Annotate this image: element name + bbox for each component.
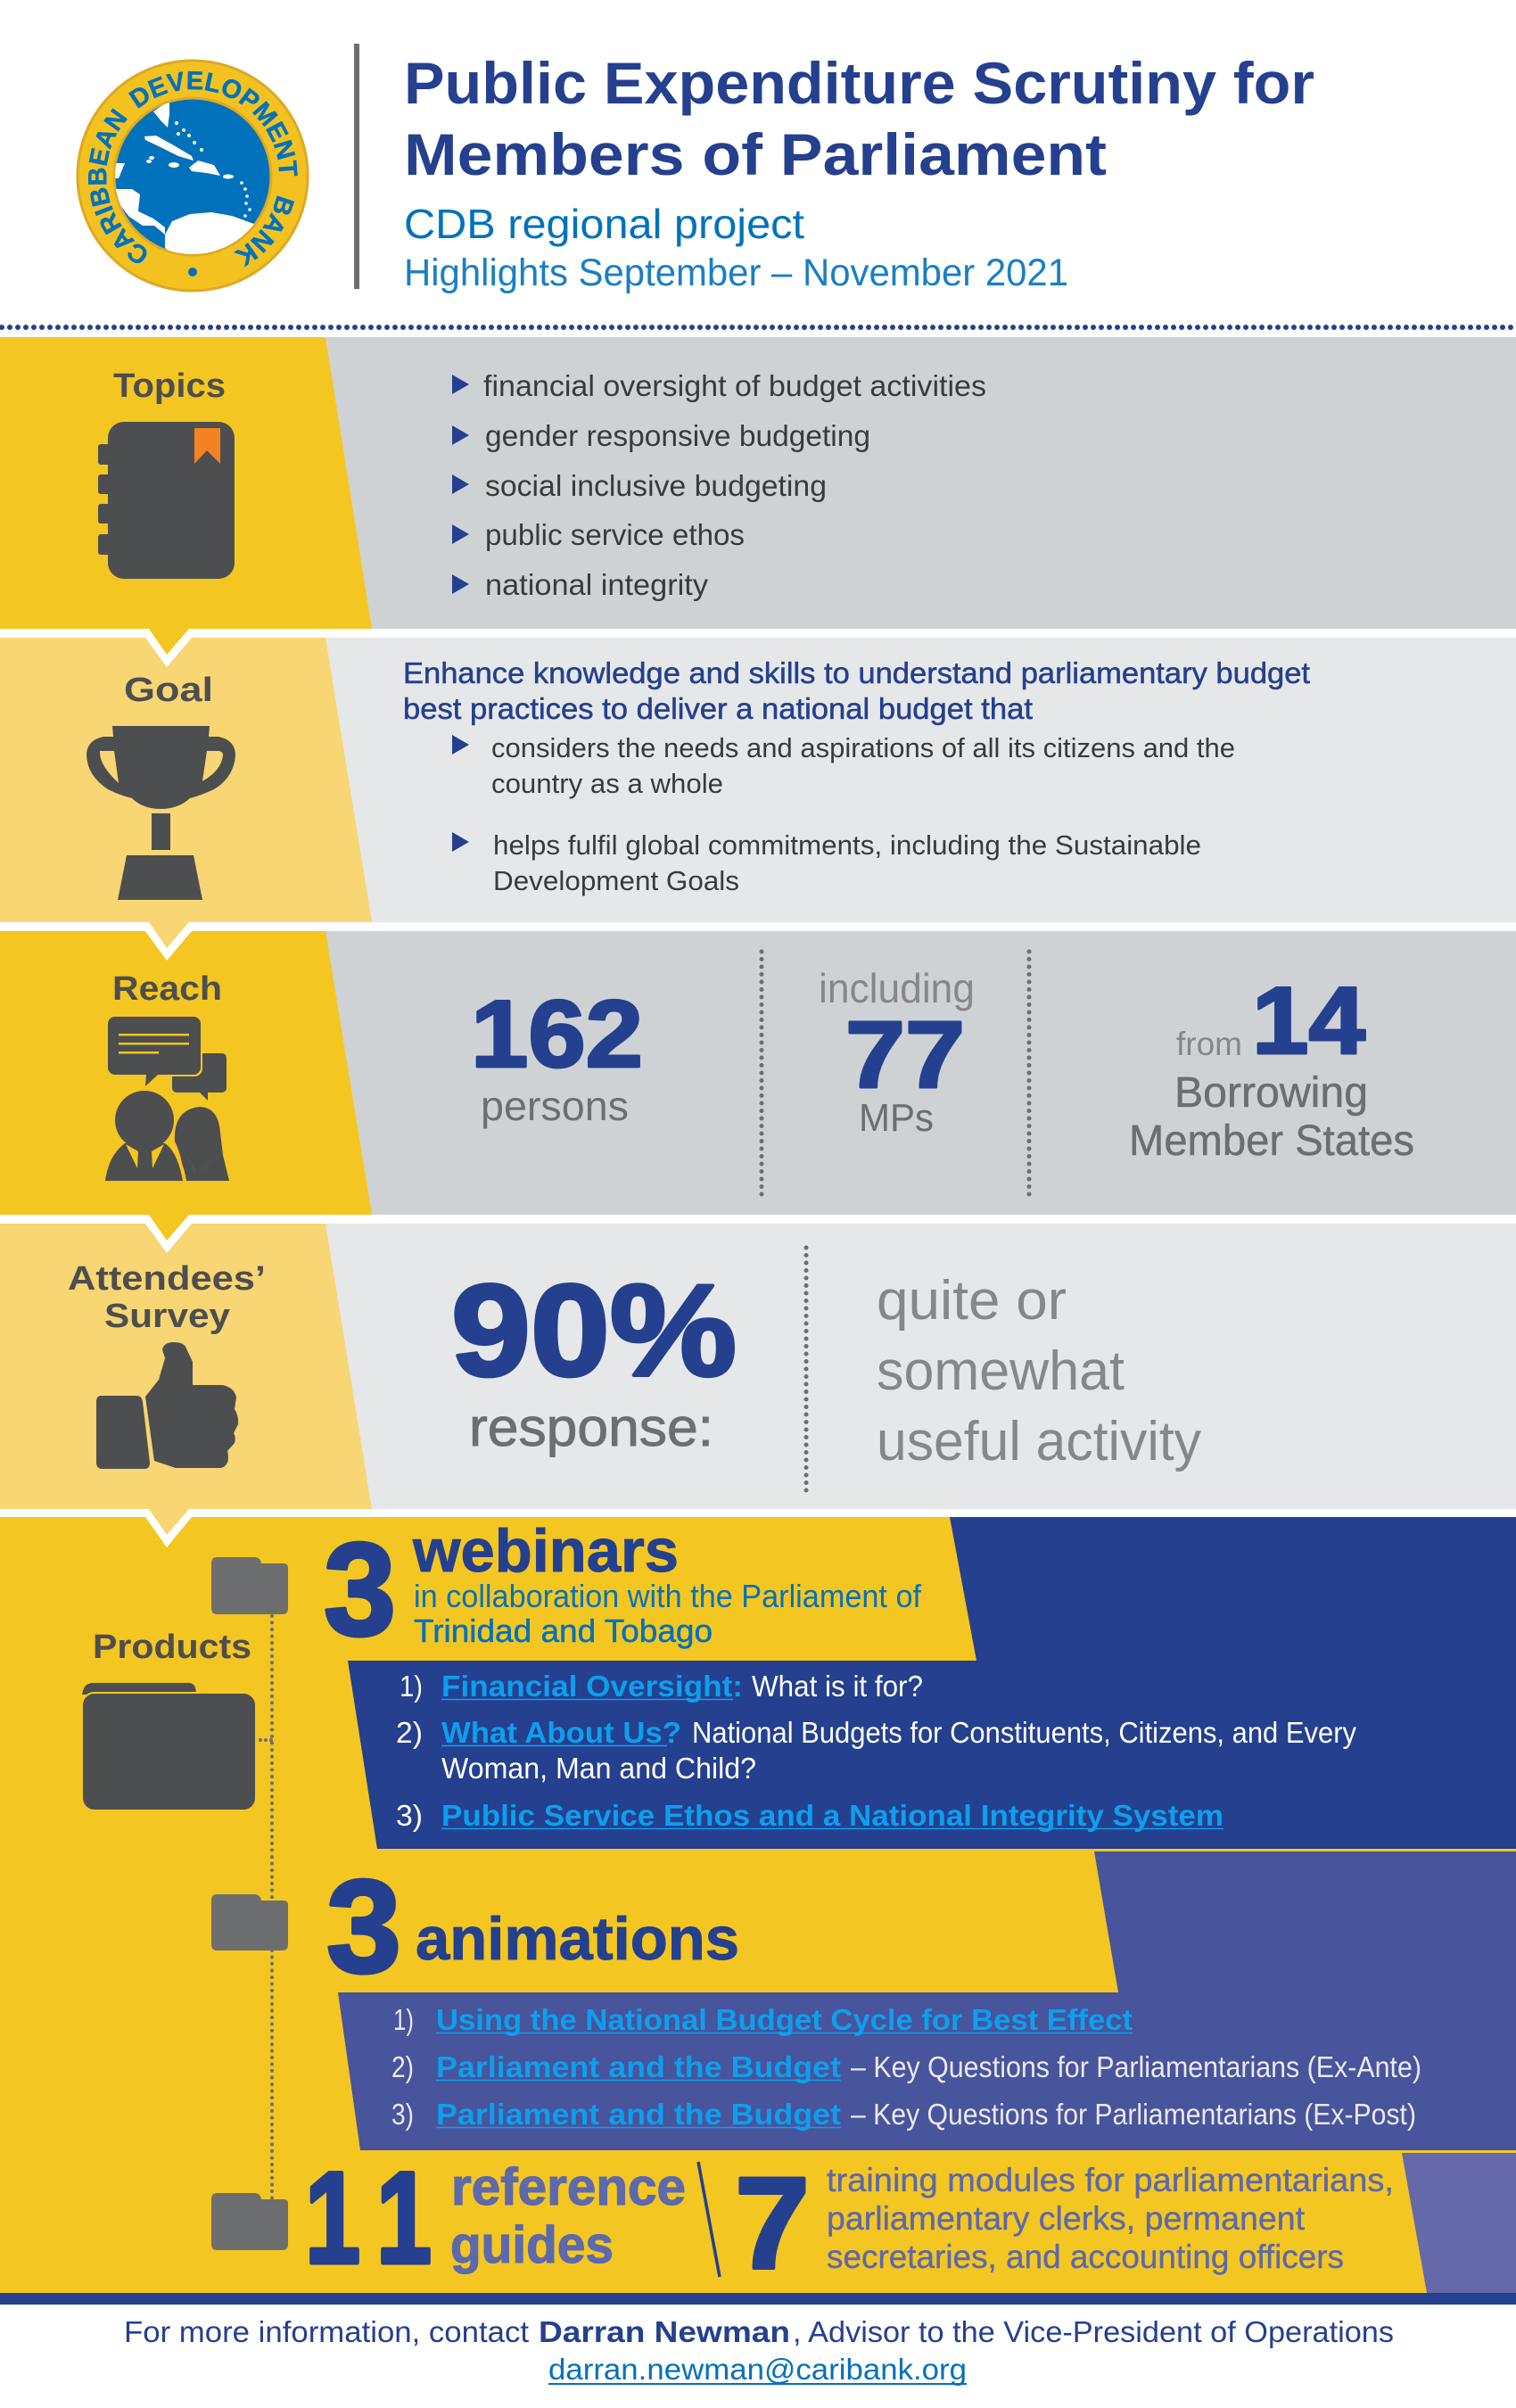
animations list: 3) <box>391 2098 414 2131</box>
arrow: goal to reach <box>145 922 192 961</box>
title <box>404 50 1314 187</box>
stat: 11 reference guides: reference <box>451 2158 686 2216</box>
stat: from 14 Borrowing Member States: Member States <box>1129 1117 1414 1165</box>
header <box>77 44 1314 294</box>
logo: Caribbean Development Bank <box>77 59 309 293</box>
stat: 11 reference guides: 1 <box>376 2145 432 2290</box>
icon: thumbs up <box>96 1342 238 1469</box>
stat: 11 reference guides <box>305 2145 686 2290</box>
logo: Caribbean Development Bank: BANK <box>234 195 294 268</box>
stat: 90% response: 90% <box>451 1258 737 1403</box>
panel: topics <box>0 337 1516 629</box>
topic list <box>452 369 986 601</box>
icon: notebook <box>98 422 235 579</box>
animations list: Using the National Budget Cycle for Best Effect <box>436 2003 1133 2036</box>
topic list: social inclusive budgeting <box>485 469 827 502</box>
stat: 90% response <box>451 1258 737 1457</box>
animations list: – Key Questions for Parliamentarians (Ex-Post) <box>851 2098 1416 2131</box>
stat: from 14 Borrowing Member States: 14 <box>1252 967 1365 1074</box>
goal text: Enhance knowledge and skills to understand parliamentary budget <box>403 656 1310 689</box>
survey result text: quite or <box>877 1270 1067 1332</box>
logo: Caribbean Development Bank: CARIBBEAN <box>87 108 147 264</box>
stat: 162 persons: 162 <box>471 980 643 1087</box>
animations list: 2) <box>391 2050 414 2083</box>
stat: from 14 Borrowing Member States: Borrowing <box>1174 1069 1368 1117</box>
arrow: reach to survey <box>145 1215 192 1253</box>
stat: 7 training modules: parliamentary clerks, permanent <box>827 2200 1306 2237</box>
icon: trophy <box>87 726 235 900</box>
footer contact: darran.newman@caribank.org <box>548 2353 967 2386</box>
icon: small folder, animations <box>211 1894 288 1950</box>
footer contact: For more information, contact <box>124 2315 529 2348</box>
stat: 7 training modules: 7 <box>735 2150 810 2296</box>
footer contact: , Advisor to the Vice-President of Operations <box>793 2315 1394 2348</box>
webinars list: National Budgets for Constituents, Citizens, and Every <box>692 1716 1356 1749</box>
stat: 7 training modules: secretaries, and accounting officers <box>827 2239 1344 2275</box>
animations list: 1) <box>393 2003 414 2036</box>
panel: reach <box>0 922 1516 1215</box>
webinars heading: 3 <box>324 1516 396 1663</box>
topic list: national integrity <box>485 568 709 601</box>
heading: Attendees' Survey: Attendees’ <box>68 1260 266 1298</box>
goal text: Development Goals <box>493 865 739 896</box>
topic list: public service ethos <box>485 518 745 551</box>
stat: including 77 MPs <box>819 965 975 1140</box>
animations list: Parliament and the Budget <box>436 2050 841 2083</box>
webinars list: Woman, Man and Child? <box>441 1752 756 1785</box>
stat: including 77 MPs: MPs <box>859 1096 934 1140</box>
stat: 7 training modules <box>735 2150 1394 2296</box>
icon: people talking <box>105 1015 229 1181</box>
subtitle <box>404 201 1068 294</box>
title: Public Expenditure Scrutiny for <box>404 50 1314 116</box>
webinars heading <box>324 1516 922 1663</box>
icon: small folder, webinars <box>211 1557 288 1614</box>
webinars heading: webinars <box>412 1517 679 1585</box>
webinars list <box>396 1670 1356 1832</box>
animations heading: 3 <box>326 1853 401 2000</box>
stat: 90% response: response: <box>469 1398 713 1457</box>
footer contact <box>124 2315 1394 2386</box>
topic list: gender responsive budgeting <box>485 419 870 452</box>
title: Members of Parliament <box>404 121 1107 187</box>
arrow: topics to goal <box>145 629 192 667</box>
stat: 7 training modules: training modules for parliamentarians, <box>827 2162 1394 2198</box>
footer contact: Darran Newman <box>539 2315 790 2348</box>
webinars list: 2) <box>396 1716 423 1749</box>
stat: including 77 MPs: including <box>819 965 975 1011</box>
stat: 162 persons <box>471 980 643 1129</box>
topic list: financial oversight of budget activities <box>483 369 986 402</box>
stat: including 77 MPs: 77 <box>845 1002 965 1108</box>
goal text: helps fulfil global commitments, including the Sustainable <box>493 829 1201 861</box>
webinars list: What is it for? <box>752 1670 923 1703</box>
goal text: best practices to deliver a national budget that <box>403 692 1033 725</box>
subtitle: CDB regional project <box>404 201 804 247</box>
stat: 11 reference guides: 1 <box>305 2145 360 2290</box>
heading: Attendees' Survey <box>68 1260 266 1335</box>
webinars list: What About Us? <box>441 1716 681 1749</box>
icon: small folder, guides <box>211 2193 288 2250</box>
stat: 162 persons: persons <box>481 1083 629 1129</box>
heading: Goal: Goal <box>124 672 213 709</box>
survey result text: somewhat <box>877 1340 1125 1402</box>
webinars list: Public Service Ethos and a National Integrity System <box>441 1799 1224 1832</box>
stat: from 14 Borrowing Member States: from <box>1176 1026 1242 1062</box>
header divider bar <box>354 44 359 289</box>
survey result text <box>877 1270 1201 1472</box>
webinars heading: Trinidad and Tobago <box>414 1612 713 1649</box>
goal text <box>403 656 1310 896</box>
arrow: survey to products <box>145 1509 192 1547</box>
webinars list: 3) <box>396 1799 423 1832</box>
panel: attendees' survey <box>0 1215 1516 1509</box>
goal text: country as a whole <box>491 768 723 799</box>
logo: Caribbean Development Bank: DEVELOPMENT <box>128 71 298 177</box>
animations list <box>391 2003 1421 2131</box>
survey result text: useful activity <box>877 1411 1201 1472</box>
heading: Products: Products <box>93 1629 251 1666</box>
goal text: considers the needs and aspirations of all its citizens and the <box>491 732 1235 763</box>
panel: goal <box>0 629 1516 922</box>
panel: products <box>0 1509 1516 2296</box>
heading: Attendees' Survey: Survey <box>104 1298 230 1335</box>
heading: Topics: Topics <box>113 367 226 405</box>
icon: large folder <box>82 1683 256 1810</box>
stat: from 14 Borrowing Member States <box>1129 967 1414 1165</box>
webinars list: Financial Oversight: <box>441 1670 743 1703</box>
webinars list: 1) <box>400 1670 423 1703</box>
animations heading: animations <box>416 1905 739 1973</box>
animations list: – Key Questions for Parliamentarians (Ex-Ante) <box>851 2050 1421 2083</box>
webinars heading: in collaboration with the Parliament of <box>414 1578 922 1614</box>
animations list: Parliament and the Budget <box>436 2098 841 2131</box>
subtitle: Highlights September – November 2021 <box>404 252 1068 294</box>
stat: 11 reference guides: guides <box>450 2216 614 2274</box>
heading: Reach: Reach <box>112 970 222 1008</box>
animations heading <box>326 1853 739 2000</box>
